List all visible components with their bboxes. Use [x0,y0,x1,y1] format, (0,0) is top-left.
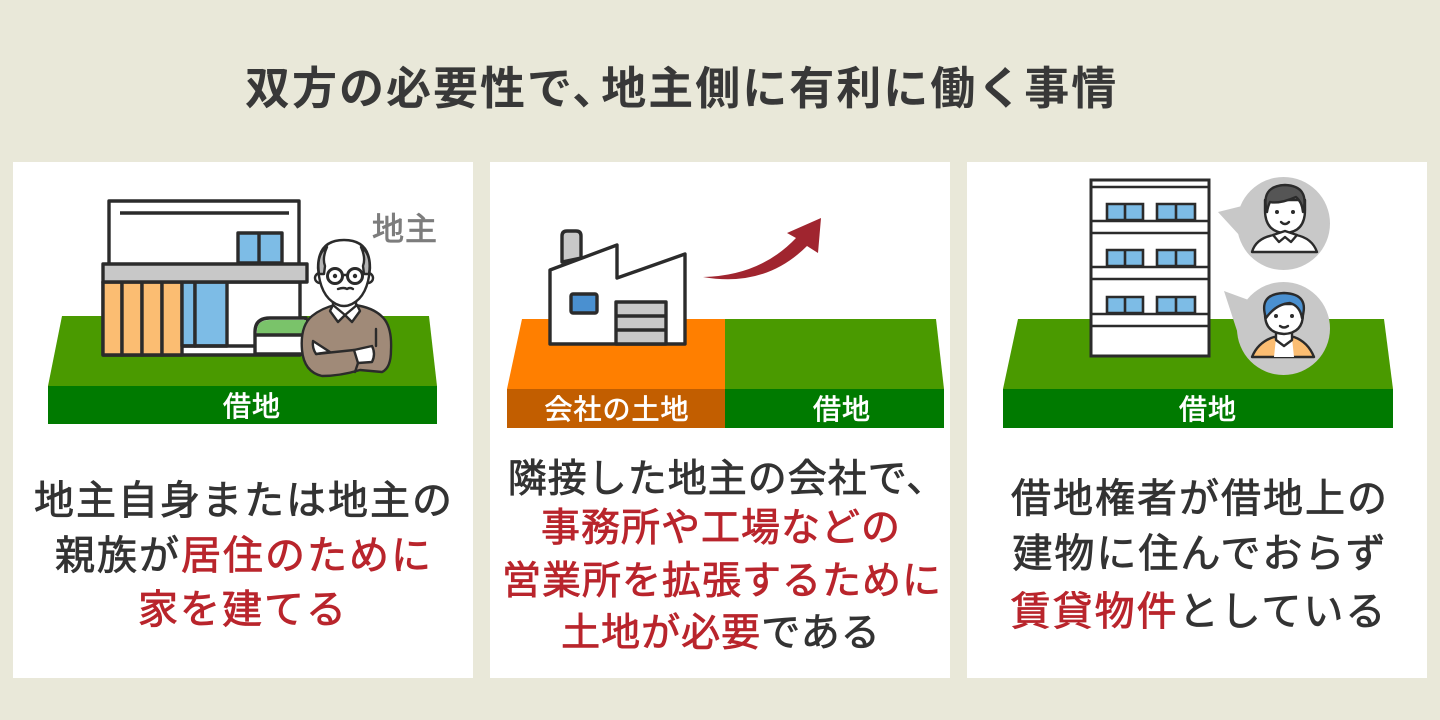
illustration: leased land plot: 借地 [1179,394,1237,425]
text: description: 借地権者が借地上の [1011,477,1389,521]
icon: tenant speech bubble 1 [1218,177,1330,270]
text: description: 建物に住んでおらず [1012,532,1388,576]
text: description: 賃貸物件としている [1011,590,1387,634]
illustration: company land and leased land [507,319,944,428]
text: description [502,458,946,655]
text: description: 営業所を拡張するために [502,560,942,603]
illustration: company land and leased land: 借地 [813,394,871,425]
icon: elderly landowner [302,240,391,376]
arrow: expansion [703,218,821,279]
icon: apartment building [1090,180,1209,356]
text: description: 土地が必要である [561,612,881,655]
text: description: 地主自身または地主の [34,479,454,523]
illustration: company land and leased land: 会社の土地 [544,394,690,425]
panel: company expansion [490,162,950,678]
panel: landowner residence [13,162,473,678]
panel: rental property [967,162,1427,678]
text: description: 隣接した地主の会社で、 [508,458,946,501]
text: description [1011,477,1389,634]
icon: house [103,201,307,355]
icon: tenant speech bubble 2 [1224,282,1330,375]
text: description: 親族が居住のために [55,534,433,578]
illustration: leased land plot [48,316,437,424]
illustration: leased land plot [1003,319,1393,428]
label: landowner: 地主 [372,211,438,247]
title: 双方の必要性で、地主側に有利に働く事情 [245,63,1118,114]
text: description [34,479,454,632]
text: description: 事務所や工場などの [541,507,901,550]
icon: factory [550,231,685,344]
text: description: 家を建てる [138,588,348,632]
illustration: leased land plot: 借地 [223,391,281,422]
